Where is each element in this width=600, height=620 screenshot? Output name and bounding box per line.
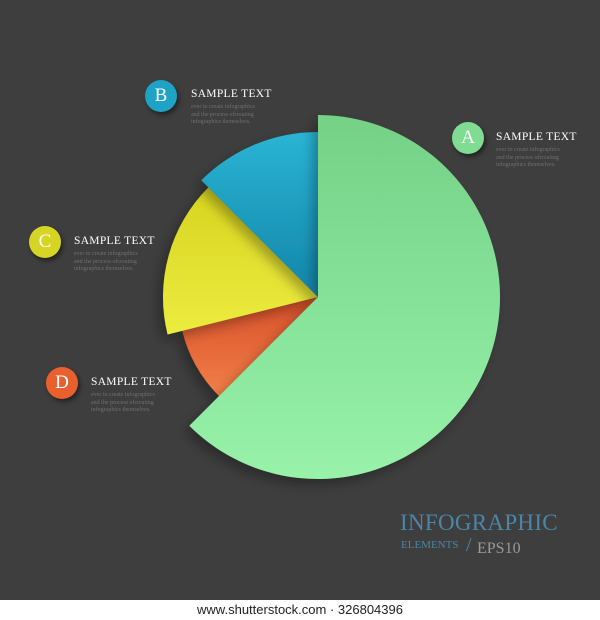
label D: and the process ofcreating (91, 400, 154, 406)
label D (46, 367, 172, 413)
title block: ELEMENTS (401, 539, 458, 551)
slice: A green (189, 115, 500, 479)
label B (145, 80, 272, 125)
title block: EPS10 (477, 540, 521, 557)
slice: D orange (182, 297, 318, 396)
title block: INFOGRAPHIC (400, 510, 558, 535)
label B: SAMPLE TEXT (191, 88, 272, 100)
label A: ever to create infographics (496, 147, 560, 153)
label A: SAMPLE TEXT (496, 131, 577, 143)
label B: B (155, 85, 167, 106)
label C: SAMPLE TEXT (74, 235, 155, 247)
title block (400, 510, 558, 557)
label A (452, 122, 577, 168)
label A: A (461, 127, 475, 148)
slice: B blue (201, 132, 318, 297)
label B: ever to create infographics (191, 104, 255, 110)
label C: C (39, 231, 51, 252)
title block: / (466, 534, 472, 556)
label C: ever to create infographics (74, 251, 138, 257)
label B: and the process ofcreating (191, 112, 254, 118)
label B: infographics themselves. (191, 119, 251, 125)
label D: D (55, 372, 69, 393)
label A: infographics themselves. (496, 162, 556, 168)
label C: and the process ofcreating (74, 258, 137, 264)
footer: www.shutterstock.com · 326804396 (197, 602, 403, 617)
label A: and the process ofcreating (496, 154, 559, 160)
label C (29, 226, 155, 272)
label C: infographics themselves. (74, 266, 134, 272)
label D: ever to create infographics (91, 392, 155, 398)
label D: SAMPLE TEXT (91, 376, 172, 388)
slice: C yellow (163, 187, 318, 334)
label D: infographics themselves. (91, 407, 151, 413)
